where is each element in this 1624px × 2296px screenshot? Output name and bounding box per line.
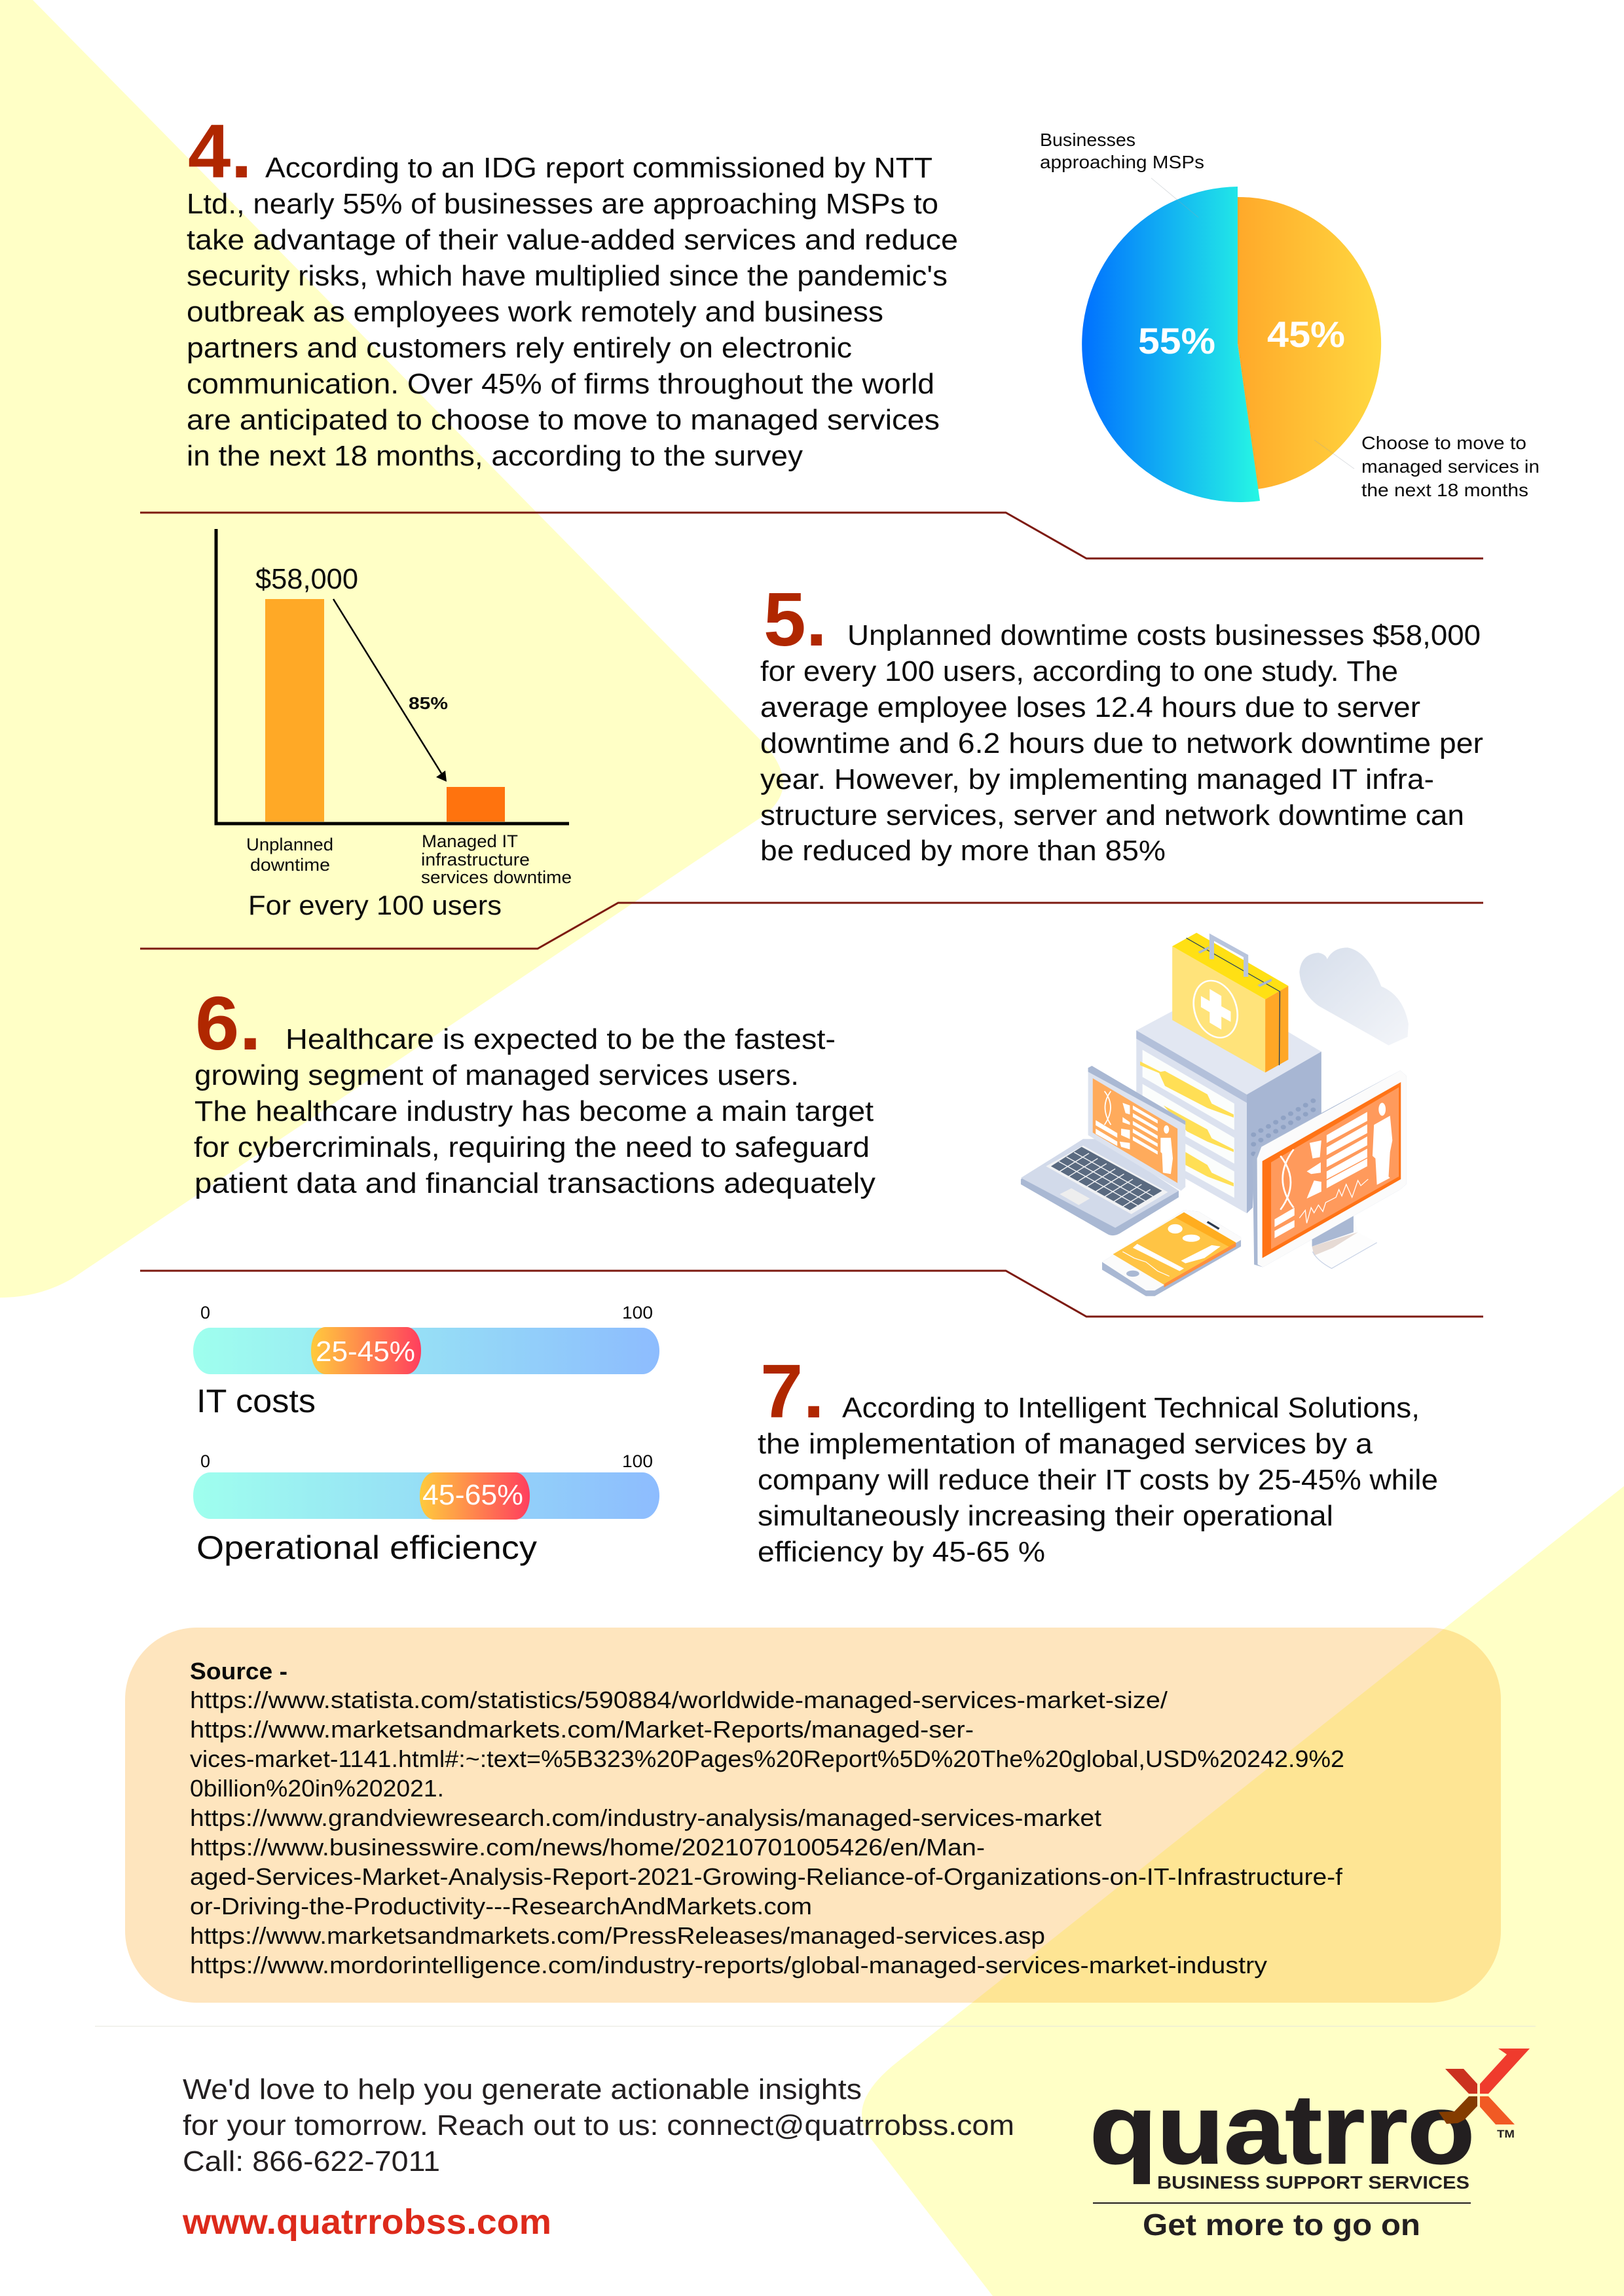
- footer contact text: We'd love to help you generate actionable insights: [183, 2073, 862, 2105]
- sources list: or-Driving-the-Productivity---ResearchAndMarkets.com: [190, 1893, 812, 1920]
- illustration: healthcare devices: [1021, 933, 1409, 1296]
- value 45-65%: 45-65%: [422, 1479, 523, 1511]
- paragraph 6: patient data and financial transactions adequately: [194, 1167, 876, 1199]
- value $58,000: $58,000: [255, 563, 358, 595]
- medical case: [1172, 933, 1288, 1072]
- label choose to move: [1361, 433, 1540, 500]
- paragraph 4: security risks, which have multiplied since the pandemic's: [187, 260, 948, 292]
- label businesses approaching MSPs: Businesses: [1040, 130, 1135, 150]
- scale 0: 0: [200, 1451, 210, 1471]
- range bar: operational efficiency: [193, 1451, 659, 1566]
- value 85%: 85%: [409, 693, 448, 713]
- sources list: [190, 1686, 1344, 1978]
- cloud: [1299, 947, 1409, 1046]
- label IT costs: IT costs: [196, 1383, 316, 1419]
- track: [193, 1472, 659, 1519]
- number 6: 6.: [195, 981, 261, 1066]
- highlighted range: [420, 1472, 530, 1520]
- value 45%: 45%: [1267, 314, 1345, 355]
- paragraph 4: Ltd., nearly 55% of businesses are approaching MSPs to: [187, 188, 938, 220]
- paragraph 7: [758, 1392, 1438, 1568]
- pie chart: [1040, 130, 1540, 502]
- sources list: vices-market-1141.html#:~:text=%5B323%20Pages%20Report%5D%20The%20global,USD%20242.9%2: [190, 1745, 1344, 1772]
- background shape: bottom-right yellow: [862, 1486, 1624, 2296]
- background shape: top-left yellow: [0, 0, 783, 1298]
- label managed IT: [421, 831, 572, 887]
- label choose to move: Choose to move to: [1361, 433, 1526, 453]
- section 5 text: [760, 577, 1483, 867]
- sources list: https://www.mordorintelligence.com/industry-reports/global-managed-services-market-industry: [190, 1952, 1267, 1978]
- logo: quatrro business support services: [1090, 2049, 1530, 2242]
- label choose to move: managed services in: [1361, 456, 1540, 477]
- footer contact text: Call: 866-622-7011: [183, 2145, 440, 2178]
- label businesses approaching MSPs: approaching MSPs: [1040, 152, 1204, 172]
- paragraph 6: growing segment of managed services users.: [194, 1059, 799, 1091]
- paragraph 7: efficiency by 45-65 %: [758, 1536, 1045, 1568]
- scale 0: 0: [200, 1303, 210, 1322]
- scale 100: 100: [622, 1451, 653, 1471]
- paragraph 4: communication. Over 45% of firms throughout the world: [187, 368, 934, 400]
- paragraph 5: downtime and 6.2 hours due to network downtime per: [760, 727, 1483, 759]
- paragraph 5: for every 100 users, according to one study. The: [760, 655, 1398, 687]
- sources list: https://www.marketsandmarkets.com/PressReleases/managed-services.asp: [190, 1922, 1045, 1949]
- paragraph 4: take advantage of their value-added services and reduce: [187, 224, 958, 256]
- paragraph 7: simultaneously increasing their operational: [758, 1500, 1333, 1532]
- arrow 85% drop: [333, 599, 447, 782]
- caption for every 100 users: For every 100 users: [248, 890, 502, 920]
- leader lines: [1151, 178, 1354, 469]
- paragraph 4: partners and customers rely entirely on electronic: [187, 332, 852, 364]
- bar chart: downtime cost: [216, 529, 572, 920]
- value 25-45%: 25-45%: [316, 1336, 415, 1368]
- sources list: aged-Services-Market-Analysis-Report-2021-Growing-Reliance-of-Organizations-on-IT-Infrastructure-f: [190, 1863, 1343, 1890]
- panel background: [125, 1628, 1501, 2003]
- paragraph 5: be reduced by more than 85%: [760, 835, 1166, 867]
- paragraph 7: company will reduce their IT costs by 25-45% while: [758, 1464, 1438, 1496]
- website link: www.quatrrobss.com: [182, 2202, 551, 2242]
- tagline: Get more to go on: [1143, 2208, 1420, 2242]
- paragraph 7: the implementation of managed services by a: [758, 1428, 1373, 1460]
- paragraph 6: Healthcare is expected to be the fastest-: [286, 1023, 836, 1055]
- paragraph 4: [187, 152, 958, 472]
- label unplanned downtime: downtime: [250, 855, 330, 875]
- paragraph 6: The healthcare industry has become a main target: [194, 1095, 874, 1127]
- sources list: https://www.statista.com/statistics/590884/worldwide-managed-services-market-size/: [190, 1686, 1168, 1713]
- label managed IT: infrastructure: [421, 850, 530, 869]
- trademark: TM: [1497, 2128, 1515, 2140]
- label unplanned downtime: Unplanned: [246, 835, 333, 854]
- number 7: 7.: [760, 1349, 824, 1434]
- number 5: 5.: [764, 577, 827, 662]
- logo subtitle: BUSINESS SUPPORT SERVICES: [1157, 2172, 1469, 2193]
- paragraph 5: [760, 619, 1483, 867]
- footer contact text: for your tomorrow. Reach out to us: connect@quatrrobss.com: [183, 2109, 1014, 2141]
- footer contact text: [183, 2073, 1014, 2178]
- paragraph 4: outbreak as employees work remotely and business: [187, 296, 883, 328]
- sources list: https://www.marketsandmarkets.com/Market-Reports/managed-ser-: [190, 1716, 974, 1743]
- number 4: 4.: [188, 109, 252, 194]
- label operational efficiency: Operational efficiency: [196, 1529, 537, 1566]
- paragraph 7: According to Intelligent Technical Solutions,: [842, 1392, 1420, 1424]
- highlighted range: [311, 1327, 421, 1374]
- label managed IT: services downtime: [421, 867, 572, 887]
- section 4 text: [187, 109, 958, 472]
- server cabinet: [1136, 1010, 1321, 1213]
- section 7 text: [758, 1349, 1438, 1568]
- paragraph 5: year. However, by implementing managed IT infra-: [760, 763, 1434, 795]
- track: [193, 1328, 659, 1374]
- paragraph 4: According to an IDG report commissioned by NTT: [265, 152, 932, 184]
- sources heading: Source -: [190, 1658, 287, 1685]
- bar managed downtime: [447, 787, 505, 822]
- laptop: [1021, 1066, 1185, 1235]
- value 55%: 55%: [1138, 320, 1215, 361]
- wordmark: quatrro: [1090, 2074, 1475, 2184]
- label managed IT: Managed IT: [422, 831, 518, 851]
- paragraph 6: for cybercriminals, requiring the need to safeguard: [194, 1131, 870, 1163]
- phone: [1102, 1211, 1241, 1296]
- chart axes: [216, 529, 569, 824]
- paragraph 5: average employee loses 12.4 hours due to server: [760, 691, 1420, 723]
- label unplanned downtime: [246, 835, 333, 875]
- paragraph 6: [194, 1023, 876, 1199]
- label businesses approaching MSPs: [1040, 130, 1204, 172]
- range bar: IT costs: [193, 1303, 659, 1419]
- monitor: [1253, 1070, 1406, 1268]
- bar unplanned downtime: [265, 599, 324, 822]
- paragraph 5: structure services, server and network downtime can: [760, 799, 1464, 831]
- pie slice 45%: [1238, 197, 1381, 489]
- sources list: 0billion%20in%202021.: [190, 1775, 444, 1802]
- label choose to move: the next 18 months: [1361, 480, 1528, 500]
- scale 100: 100: [622, 1303, 653, 1322]
- paragraph 4: are anticipated to choose to move to managed services: [187, 404, 940, 436]
- panel: sources: [125, 1628, 1501, 2003]
- paragraph 4: in the next 18 months, according to the survey: [187, 440, 803, 472]
- pie slice 55%: [1082, 187, 1260, 502]
- sources list: https://www.grandviewresearch.com/industry-analysis/managed-services-market: [190, 1804, 1101, 1831]
- sources list: https://www.businesswire.com/news/home/20210701005426/en/Man-: [190, 1834, 985, 1861]
- paragraph 5: Unplanned downtime costs businesses $58,000: [847, 619, 1481, 651]
- logo x mark: [1439, 2049, 1530, 2124]
- section 6 text: [194, 981, 876, 1199]
